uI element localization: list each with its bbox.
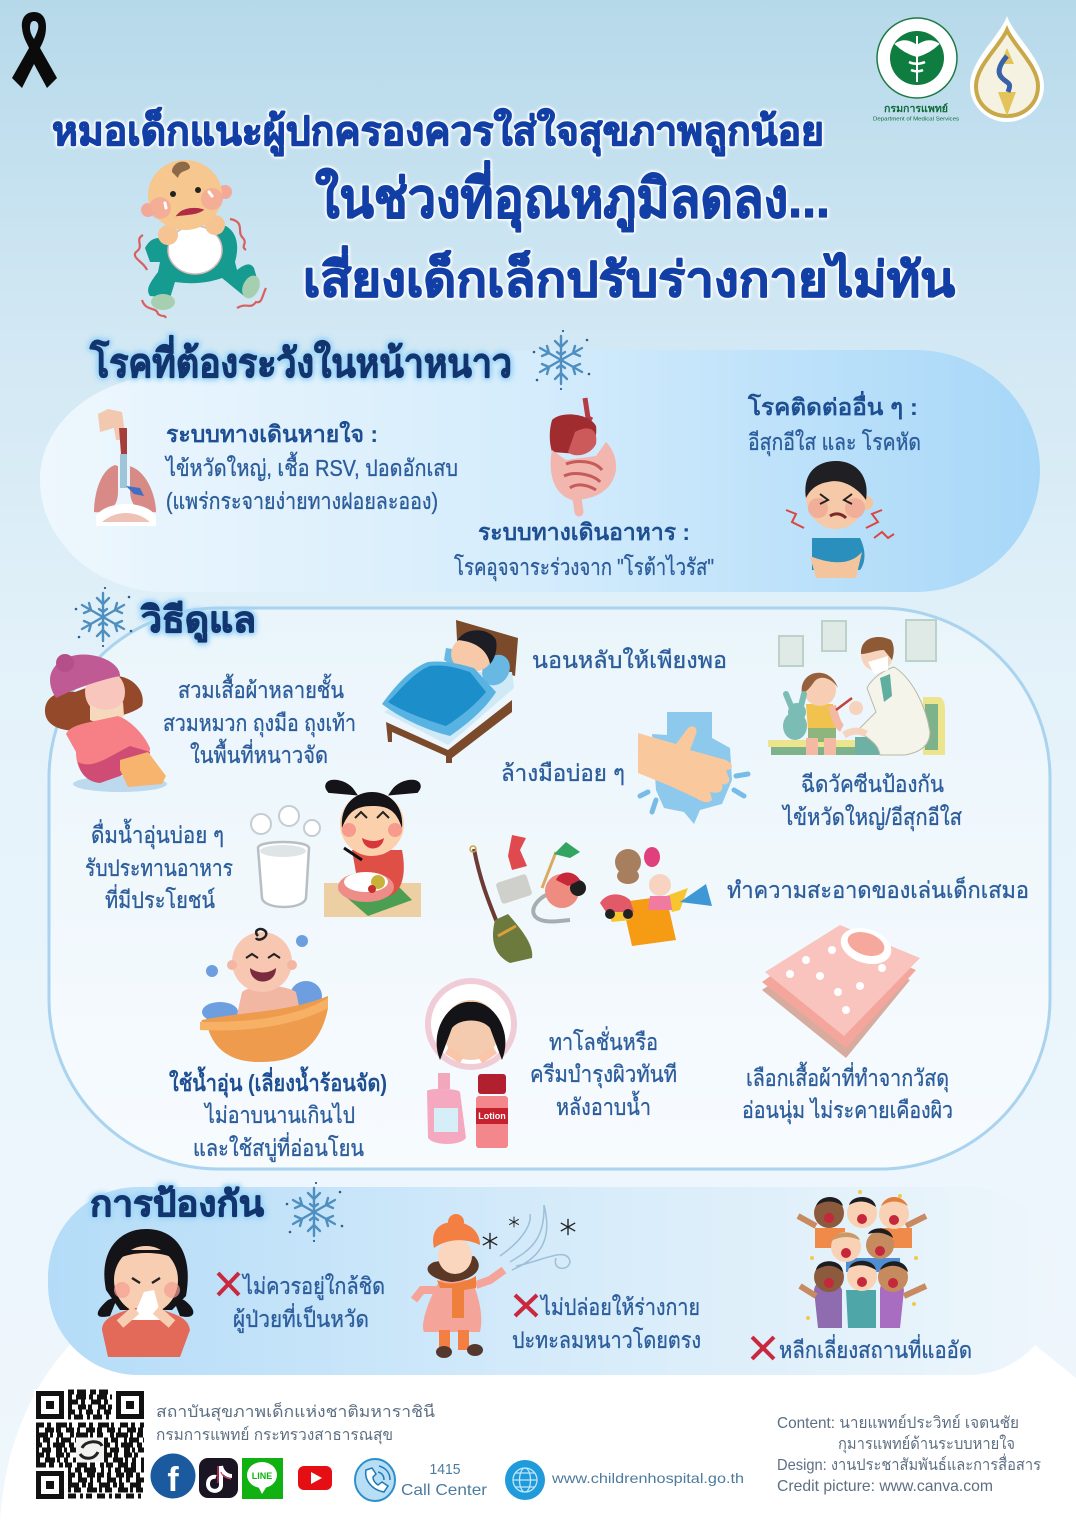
- logo: ministry of public health: [873, 18, 960, 122]
- text: warm water and food: ดื่มน้ำอุ่นบ่อย ๆ: [91, 819, 224, 849]
- panel: winter diseases: [40, 330, 1040, 592]
- icon: facebook: [150, 1454, 196, 1499]
- text: clean toys: ทำความสะอาดของเล่นเด็กเสมอ: [727, 875, 1029, 903]
- text: credits: Credit picture: www.canva.com: [777, 1478, 993, 1495]
- icon: facebook: f: [167, 1461, 179, 1499]
- icon: snowflake: [75, 587, 132, 647]
- text: warm water and food: [85, 819, 233, 913]
- text: soft clothes: อ่อนนุ่ม ไม่ระคายเคืองผิว: [742, 1097, 953, 1124]
- icon: baby bathing: [200, 929, 328, 1062]
- logo: ministry of public health: กรมการแพทย์: [884, 103, 948, 115]
- icon: doctor vaccinating child: [768, 620, 945, 755]
- icon: shivering baby: [135, 160, 266, 318]
- text: digestive system: โรคอุจจาระร่วงจาก "โรต้าไวรัส": [454, 554, 714, 581]
- text: call center: 1415: [430, 1461, 460, 1478]
- text: avoid cold wind: ไม่ปล่อยให้ร่างกาย: [539, 1294, 700, 1320]
- text: avoid cold wind: [512, 1294, 701, 1353]
- text: warm water and food: รับประทานอาหาร: [85, 855, 233, 881]
- text: respiratory system: [164, 420, 458, 514]
- title: [52, 106, 955, 307]
- icon: folded clothes: [762, 922, 920, 1058]
- icon: skin lotion: [427, 981, 514, 1148]
- text: sleep enough: นอนหลับให้เพียงพอ: [532, 647, 727, 673]
- icon: black mourning ribbon: [12, 12, 57, 88]
- text: digestive system: [454, 519, 714, 581]
- text: dress warmly: ในพื้นที่หนาวจัด: [190, 739, 328, 768]
- text: respiratory system: (แพร่กระจายง่ายทางฝอยละออง): [166, 488, 438, 514]
- text: credits: กุมารแพทย์ด้านระบบหายใจ: [838, 1434, 1015, 1454]
- text: credits: Design: งานประชาสัมพันธ์และการสื่อสาร: [777, 1453, 1041, 1474]
- text: dress warmly: [163, 674, 356, 768]
- icon: cleaning tools: [470, 835, 586, 963]
- heading: prevention: การป้องกัน: [90, 1183, 264, 1224]
- text: other infectious diseases: อีสุกอีใส และ โรคหัด: [748, 429, 921, 456]
- text: website: www.childrenhospital.go.th: [551, 1470, 744, 1486]
- icon: youtube: [298, 1466, 332, 1490]
- text: other infectious diseases: โรคติดต่ออื่น ๆ :: [747, 390, 918, 420]
- text: other infectious diseases: [747, 390, 921, 456]
- text: dress warmly: สวมหมวก ถุงมือ ถุงเท้า: [163, 710, 356, 737]
- panel: care methods: [45, 587, 1050, 1169]
- text: apply lotion: [530, 1026, 677, 1120]
- icon: snowflake: [533, 330, 590, 390]
- text: apply lotion: หลังอาบน้ำ: [556, 1091, 651, 1120]
- icon: tiktok: [199, 1458, 238, 1498]
- text: apply lotion: ครีมบำรุงผิวทันที: [530, 1061, 677, 1088]
- text: vaccination: [781, 771, 962, 831]
- QR code: [34, 1389, 146, 1501]
- text: soft clothes: เลือกเสื้อผ้าที่ทำจากวัสดุ: [746, 1062, 949, 1092]
- icon: snowflake: [286, 1182, 343, 1242]
- icon: cross mark: [218, 1273, 239, 1295]
- text: avoid cold wind: ปะทะลมหนาวโดยตรง: [512, 1327, 701, 1353]
- text: call center: Call Center: [401, 1482, 488, 1499]
- text: avoid sick people: [233, 1273, 385, 1333]
- title: หมอเด็กแนะผู้ปกครองควรใส่ใจสุขภาพลูกน้อย: [52, 106, 824, 157]
- text: institute name: [156, 1401, 435, 1445]
- text: credits: Content: นายแพทย์ประวิทย์ เจตนชัย: [777, 1413, 1019, 1432]
- heading: care: วิธีดูแล: [140, 599, 256, 643]
- text: soft clothes: [742, 1062, 953, 1124]
- panel: prevention: [48, 1182, 1058, 1375]
- heading: winter diseases: โรคที่ต้องระวังในหน้าหนาว: [89, 335, 512, 386]
- text: credits: [777, 1413, 1041, 1495]
- text: dress warmly: สวมเสื้อผ้าหลายชั้น: [178, 674, 344, 703]
- text: warm bath: ใช้น้ำอุ่น (เลี่ยงน้ำร้อนจัด): [169, 1066, 387, 1098]
- icon: warm glass of water: [251, 806, 320, 907]
- text: warm water and food: ที่มีประโยชน์: [105, 884, 215, 913]
- text: apply lotion: ทาโลชั่นหรือ: [549, 1026, 658, 1055]
- icon: sneezing girl: [98, 1229, 193, 1357]
- text: respiratory system: ไข้หวัดใหญ่, เชื้อ RSV, ปอดอักเสบ: [164, 452, 458, 481]
- text: vaccination: ไข้หวัดใหญ่/อีสุกอีใส: [781, 804, 962, 831]
- text: digestive system: ระบบทางเดินอาหาร :: [478, 519, 690, 545]
- icon: lungs: [94, 409, 156, 526]
- text: avoid sick people: ไม่ควรอยู่ใกล้ชิด: [241, 1273, 385, 1300]
- icon: crowd of children: [798, 1190, 926, 1328]
- icon: line: [242, 1458, 283, 1499]
- text: wash hands: ล้างมือบ่อย ๆ: [501, 760, 625, 786]
- icon: child sleeping in bed: [382, 620, 518, 763]
- icon: skin lotion: Lotion: [478, 1111, 506, 1121]
- icon: toys in a box: [600, 847, 712, 946]
- icon: girl eating: [324, 783, 421, 917]
- icon: globe: [505, 1460, 545, 1500]
- icon: child in cold wind: [414, 1205, 575, 1358]
- text: avoid crowds: หลีกเลี่ยงสถานที่แออัด: [779, 1334, 972, 1363]
- text: call center: [401, 1461, 488, 1499]
- icon: hand washing: [638, 712, 748, 824]
- icon: phone call centre: [355, 1459, 395, 1501]
- icon: girl in winter clothes: [45, 654, 167, 792]
- icon: line: LINE: [252, 1471, 272, 1481]
- text: warm bath: และใช้สบู่ที่อ่อนโยน: [193, 1132, 364, 1162]
- logo: gold drop emblem: [970, 16, 1044, 122]
- title: ในช่วงที่อุณหภูมิลดลง...: [315, 160, 830, 233]
- icon: digestive organs: [550, 398, 616, 512]
- text: vaccination: ฉีดวัคซีนป้องกัน: [801, 771, 944, 797]
- text: institute name: กรมการแพทย์ กระทรวงสาธารณสุข: [156, 1425, 393, 1445]
- icon: cross mark: [752, 1337, 774, 1359]
- text: respiratory system: ระบบทางเดินหายใจ :: [166, 420, 378, 447]
- text: warm bath: ไม่อาบนานเกินไป: [203, 1102, 355, 1128]
- logo: ministry of public health: Department of Medical Services: [873, 116, 960, 122]
- title: เสี่ยงเด็กเล็กปรับร่างกายไม่ทัน: [303, 245, 955, 307]
- icon: cross mark: [515, 1295, 537, 1316]
- text: avoid sick people: ผู้ป่วยที่เป็นหวัด: [233, 1303, 369, 1333]
- text: institute name: สถาบันสุขภาพเด็กแห่งชาติมหาราชินี: [156, 1401, 435, 1422]
- icon: boy with rash: [786, 461, 894, 578]
- text: warm bath: [169, 1066, 387, 1162]
